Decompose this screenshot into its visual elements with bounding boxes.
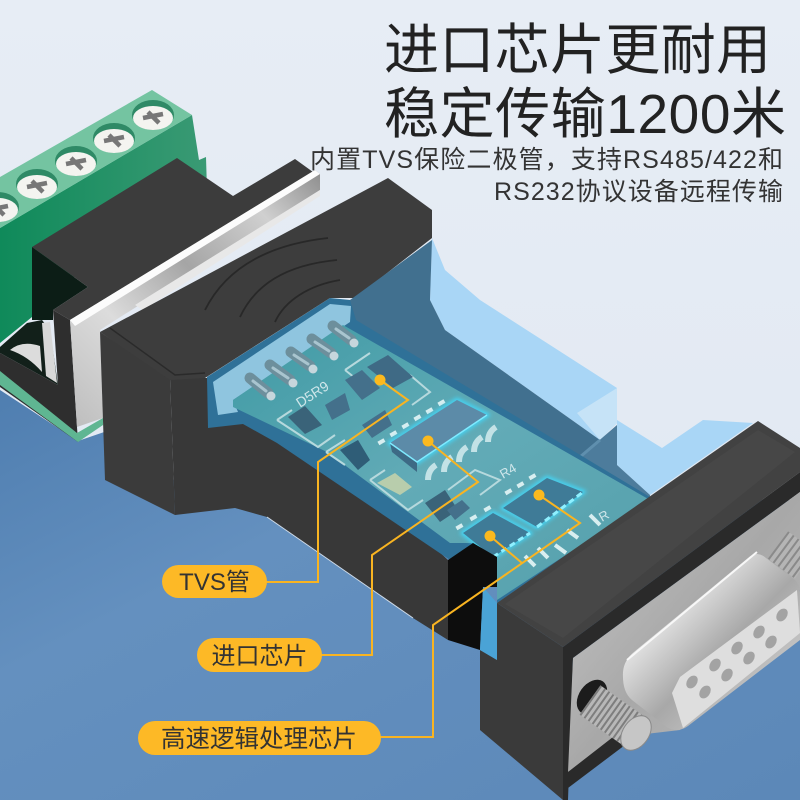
title: [384, 19, 786, 145]
title: 进口芯片更耐用: [384, 19, 771, 81]
transparent shell with circuit board: [207, 298, 650, 603]
label: 进口芯片: [197, 638, 322, 672]
label: TVS管: TVS管: [179, 569, 250, 596]
title: 稳定传输1200米: [384, 83, 786, 145]
callout dots: [374, 374, 544, 542]
callout line: imported chip: [320, 441, 478, 655]
D-sub shell: [623, 552, 800, 730]
component pins: [250, 326, 358, 400]
subtitle text: [310, 146, 783, 206]
black gap between housings: [448, 543, 497, 650]
callout line: logic chip: [380, 495, 580, 737]
terminal screws: [0, 100, 174, 222]
main IC chip: [390, 400, 496, 480]
metal plate: [568, 492, 800, 772]
subtitle text: RS232协议设备远程传输: [494, 178, 783, 206]
main body dark housing: [100, 178, 448, 640]
icon: lower thumb screw: [570, 674, 658, 756]
transparent shell back wall: [343, 238, 753, 500]
icon: upper thumb screw: [778, 545, 800, 565]
label: TVS管: [162, 565, 267, 598]
board label R4: R4: [497, 460, 519, 482]
top SMD chip: [367, 355, 413, 388]
shell lower band: [207, 298, 650, 603]
label: 高速逻辑处理芯片: 高速逻辑处理芯片: [161, 725, 357, 753]
callout line: TVS: [265, 380, 408, 582]
board label D5R9: D5R9: [293, 377, 332, 411]
left connector hood: [0, 158, 320, 442]
D-sub pin holes: [684, 606, 790, 701]
label: 进口芯片: 进口芯片: [212, 643, 308, 670]
icon: signal arcs on hood: [205, 238, 340, 322]
subtitle text: 内置TVS保险二极管，支持RS485/422和: [310, 146, 783, 174]
pad dots row: [377, 399, 536, 530]
shell front strip: [480, 587, 497, 660]
label: 高速逻辑处理芯片: [138, 721, 381, 755]
board label R: R: [596, 507, 612, 525]
small SMD parts: [288, 370, 470, 522]
right IC chips: [463, 478, 600, 566]
pad outlines: [277, 353, 500, 510]
right connector hood: [480, 421, 800, 800]
green terminal block: [0, 90, 207, 343]
circuit board: [233, 325, 650, 600]
